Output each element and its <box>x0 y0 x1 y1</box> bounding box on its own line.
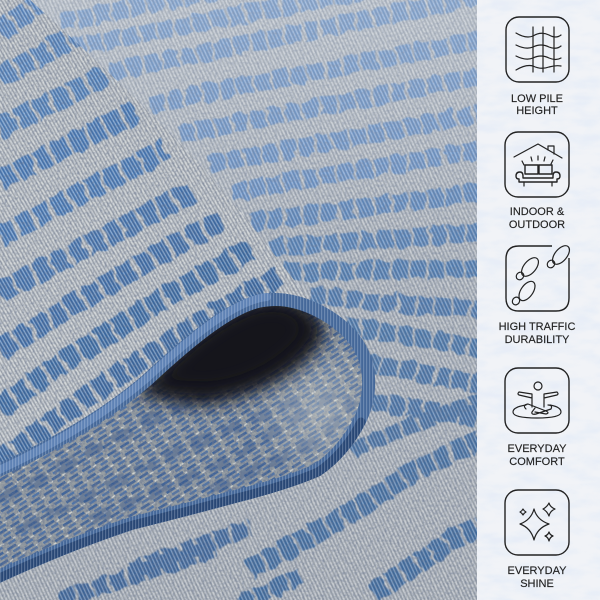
label: indoor and outdoor: INDOOR & <box>510 206 565 218</box>
label: high traffic durability: DURABILITY <box>505 334 570 346</box>
feature: everyday shine <box>505 490 569 590</box>
feature: indoor and outdoor <box>505 132 569 231</box>
rug floor surface <box>0 0 480 600</box>
underside of rug with dark hollow <box>0 306 362 568</box>
icon: pile weave <box>506 17 569 82</box>
rug binding edge <box>0 297 369 580</box>
icon: footprints <box>506 243 573 311</box>
label: indoor and outdoor: OUTDOOR <box>509 219 565 231</box>
label: everyday comfort: EVERYDAY <box>508 443 567 455</box>
feature: everyday comfort <box>505 368 569 468</box>
feature column background <box>477 0 600 600</box>
icon: meditating person <box>505 368 569 433</box>
label: low pile height: LOW PILE <box>511 93 563 105</box>
feature: high traffic durability <box>499 243 575 346</box>
label: high traffic durability: HIGH TRAFFIC <box>499 321 575 333</box>
feature: low pile height <box>506 17 569 117</box>
label: low pile height: HEIGHT <box>516 105 558 117</box>
label: everyday shine: SHINE <box>520 578 554 590</box>
icon: house with sofa <box>505 132 569 197</box>
label: everyday shine: EVERYDAY <box>508 565 567 577</box>
rolled rug flap <box>0 0 330 480</box>
icon: sparkles <box>505 490 569 555</box>
label: everyday comfort: COMFORT <box>509 456 565 468</box>
